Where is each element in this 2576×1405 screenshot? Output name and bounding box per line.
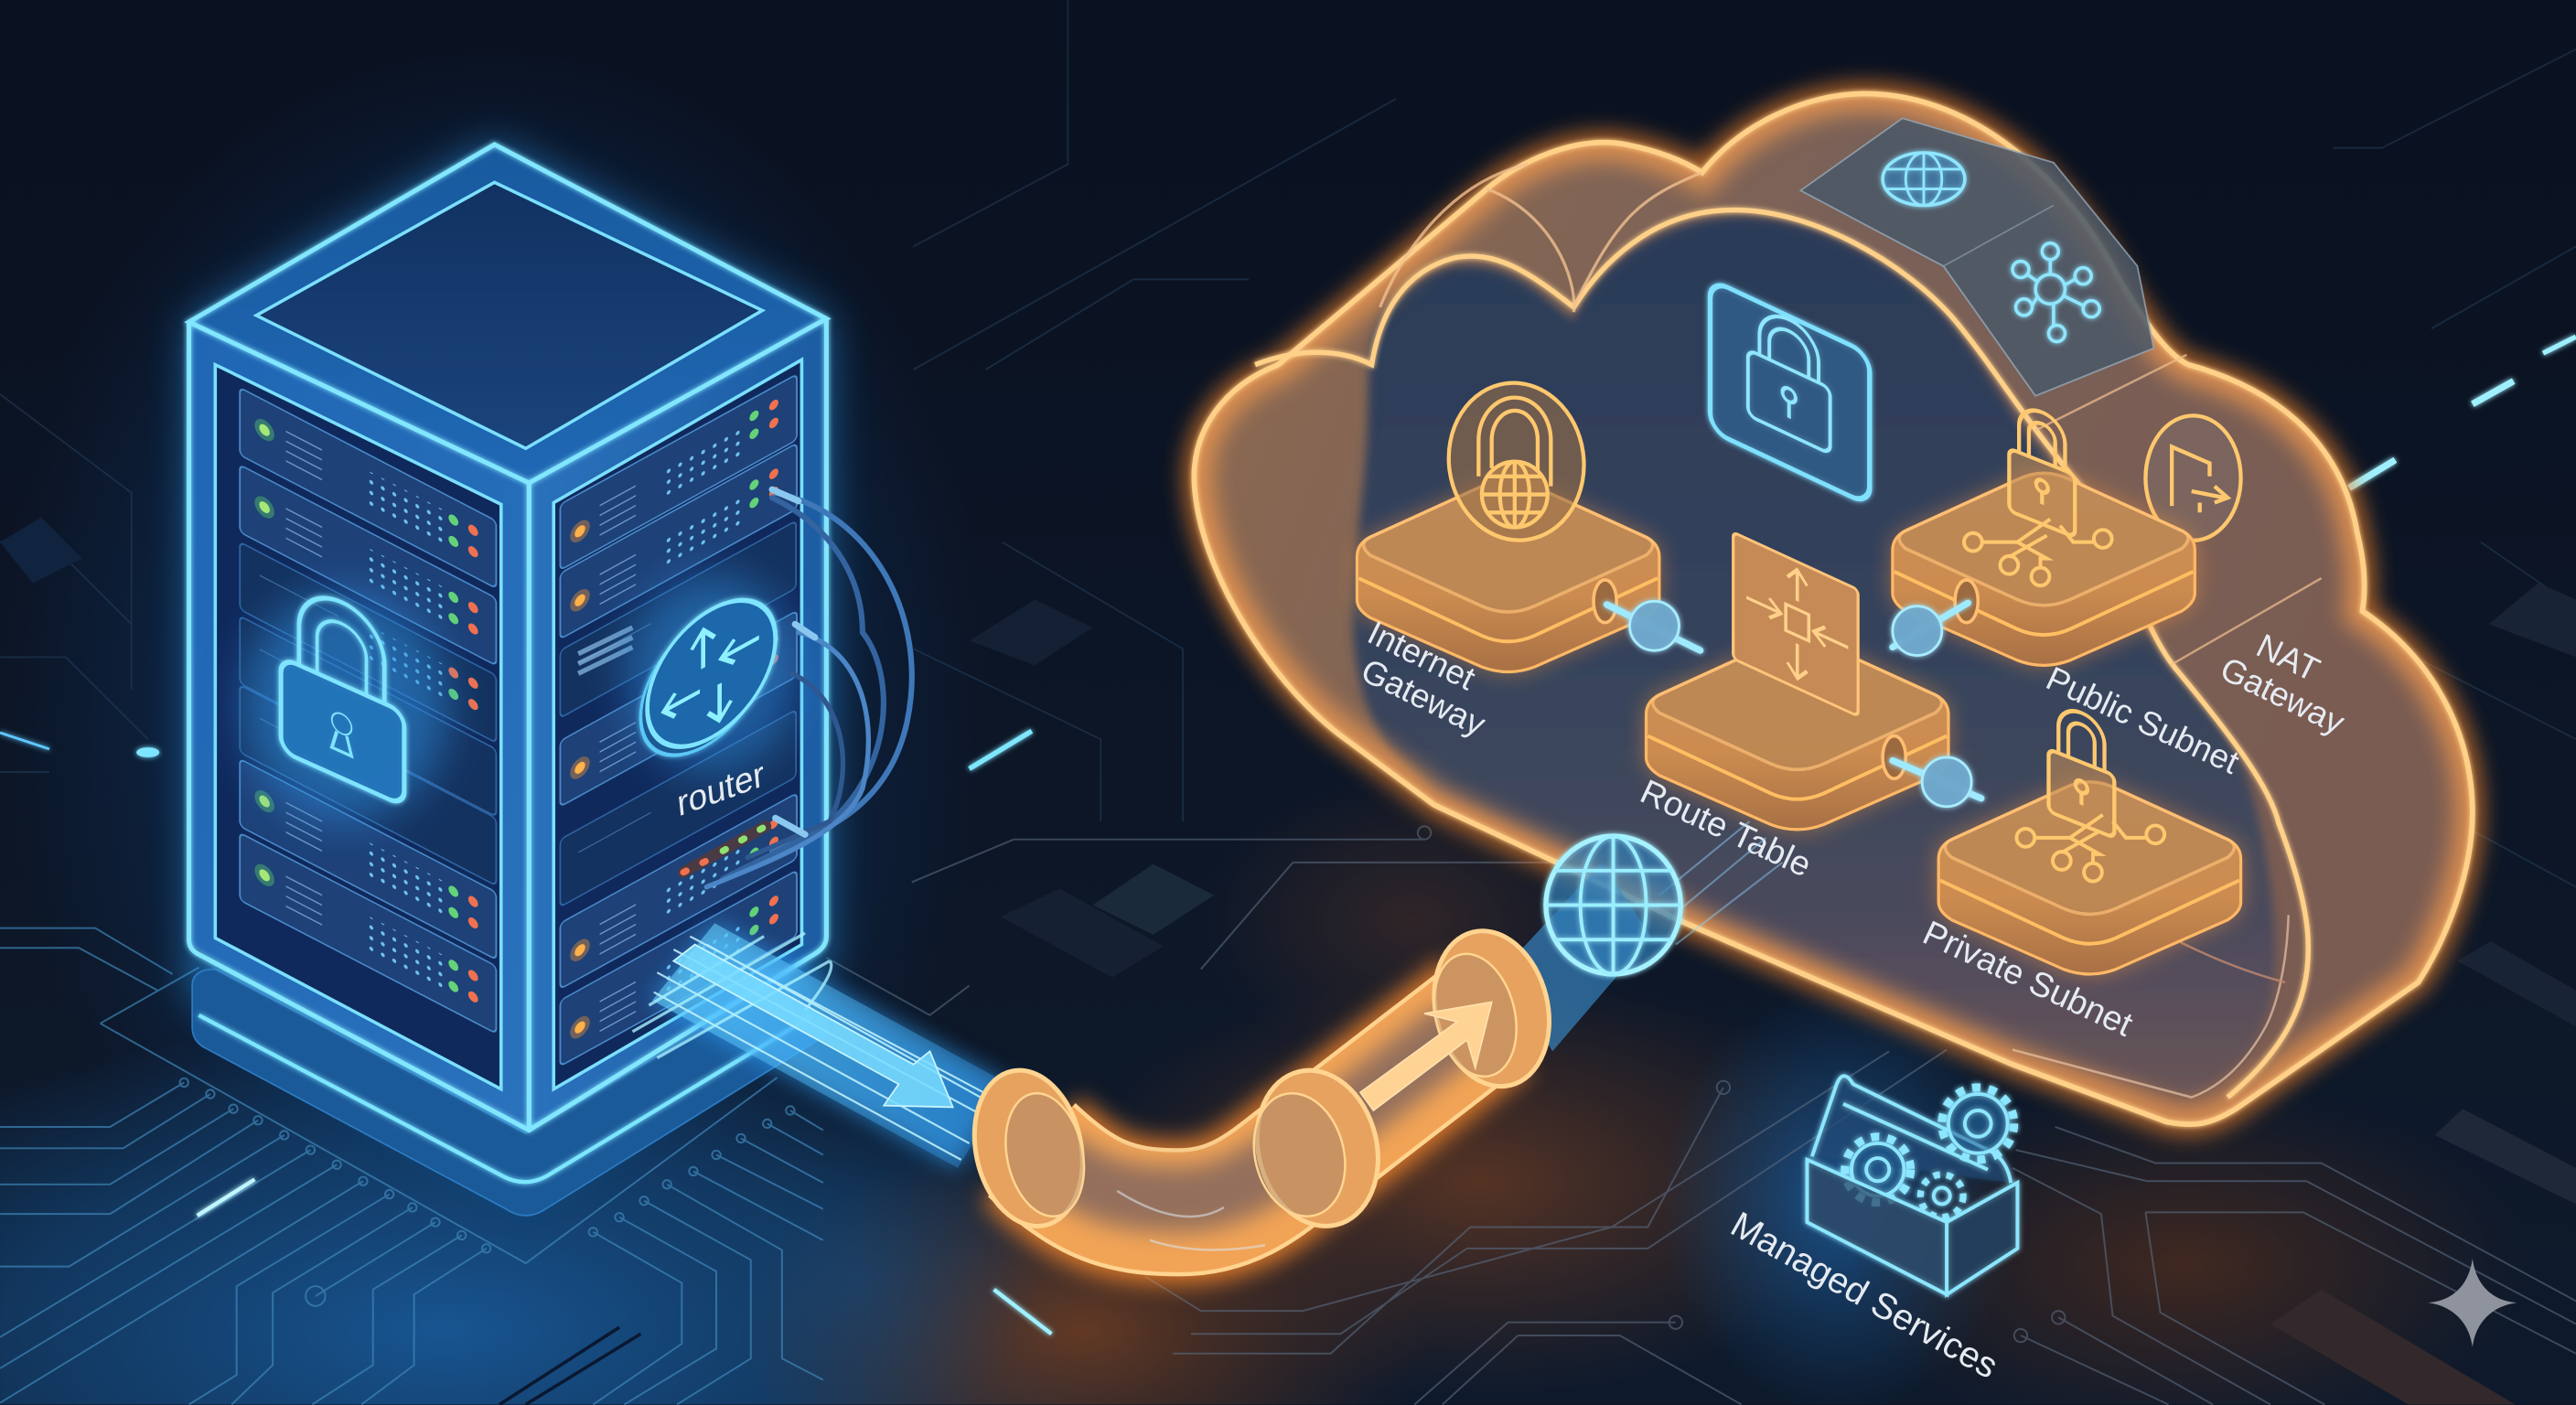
icon: public subnet lock and tree bbox=[1964, 399, 2112, 585]
left face bbox=[189, 322, 529, 1131]
circuit traces left bbox=[0, 928, 823, 1404]
connector ports bbox=[1594, 580, 1978, 778]
outer cloud rim bbox=[1194, 93, 2473, 1124]
front cloud rim bbox=[1255, 210, 2308, 1098]
router bloom bbox=[626, 575, 797, 772]
watermark star bbox=[2428, 1259, 2517, 1347]
pipe glow bbox=[1032, 1015, 1487, 1212]
label: internet gateway: Internet bbox=[1362, 614, 1481, 697]
label: route table: Route Table bbox=[1635, 772, 1818, 885]
pipe flow highlights bbox=[1117, 1191, 1265, 1249]
data arrow beam bbox=[632, 923, 1009, 1168]
icon: gateway coin with lock and globe bbox=[1439, 374, 1594, 549]
outer edges bbox=[189, 145, 826, 1131]
slab: public subnet bbox=[1893, 473, 2195, 665]
cloud bbox=[1194, 93, 2473, 1124]
icon: toolbox with gears bbox=[1807, 1076, 2017, 1294]
icon: router disc bbox=[640, 574, 776, 781]
toolbox body bbox=[1807, 1160, 1947, 1294]
connector node spheres bbox=[1630, 601, 1971, 807]
lock bloom bbox=[243, 592, 447, 821]
left rack bay bbox=[215, 365, 501, 1089]
light streaks bbox=[0, 337, 2576, 1334]
icon: cloud padlock card bbox=[1711, 279, 1870, 505]
label: NAT gateway: Gateway bbox=[2215, 649, 2351, 742]
pipe beam to globe bbox=[1503, 863, 1651, 1051]
cloud fold lines bbox=[2035, 355, 2322, 665]
server rack bbox=[189, 145, 912, 1216]
icon: globe bbox=[1546, 836, 1680, 974]
icon: hub nodes bbox=[2012, 243, 2099, 342]
slab: route table bbox=[1646, 638, 1948, 830]
pipe rim bbox=[1032, 1015, 1487, 1212]
gears bbox=[1845, 1088, 2014, 1217]
toolbox handle bbox=[1812, 1076, 2011, 1183]
pipe arrow bbox=[1360, 1002, 1492, 1110]
top face bbox=[189, 145, 826, 483]
right rack units bbox=[560, 374, 797, 1067]
slab: private subnet bbox=[1938, 782, 2241, 974]
network cables bbox=[683, 489, 912, 887]
faint upper traces bbox=[0, 0, 2576, 887]
cloud shell bbox=[1194, 93, 2473, 1124]
pipe tube bbox=[1032, 1015, 1487, 1212]
label: private subnet: Private Subnet bbox=[1917, 913, 2139, 1044]
left rack units bbox=[240, 388, 496, 1034]
back panel with icons bbox=[1800, 118, 2153, 396]
arrow shaft and head bbox=[673, 945, 953, 1107]
label: public subnet: Public Subnet bbox=[2041, 660, 2245, 781]
icon: globe small bbox=[1883, 153, 1965, 205]
route table card bbox=[1733, 532, 1858, 716]
cloud back lobe rim bbox=[1380, 165, 1702, 312]
right rack bay bbox=[553, 359, 801, 1089]
router label: router bbox=[675, 754, 767, 825]
pipe interior shade bbox=[1051, 1026, 1462, 1199]
slab: internet gateway bbox=[1357, 479, 1659, 672]
internet pipe bbox=[961, 821, 1783, 1249]
top recess bbox=[256, 182, 762, 448]
icon: padlock on rack bbox=[281, 575, 404, 806]
server base bbox=[192, 970, 826, 1216]
right face bbox=[529, 318, 826, 1131]
label: managed services: Managed Services bbox=[1724, 1204, 2004, 1387]
icon: private subnet lock and tree bbox=[2016, 700, 2164, 881]
circuit traces centre and right bbox=[826, 826, 2576, 1404]
connector lines bbox=[1606, 603, 1981, 799]
label: NAT gateway: NAT bbox=[2250, 627, 2325, 689]
label: internet gateway: Gateway bbox=[1356, 651, 1492, 744]
dark chips bbox=[0, 518, 2576, 1404]
cloud inner glow bbox=[1194, 93, 2473, 1124]
pipe cuffs bbox=[961, 918, 1565, 1239]
second inner rim bbox=[2012, 915, 2289, 1098]
cloud interior hollow bbox=[1353, 217, 2276, 1098]
server glow bbox=[192, 145, 826, 1186]
cloud glow bbox=[1194, 93, 2473, 1124]
icon: NAT gateway disc bbox=[2145, 415, 2241, 541]
